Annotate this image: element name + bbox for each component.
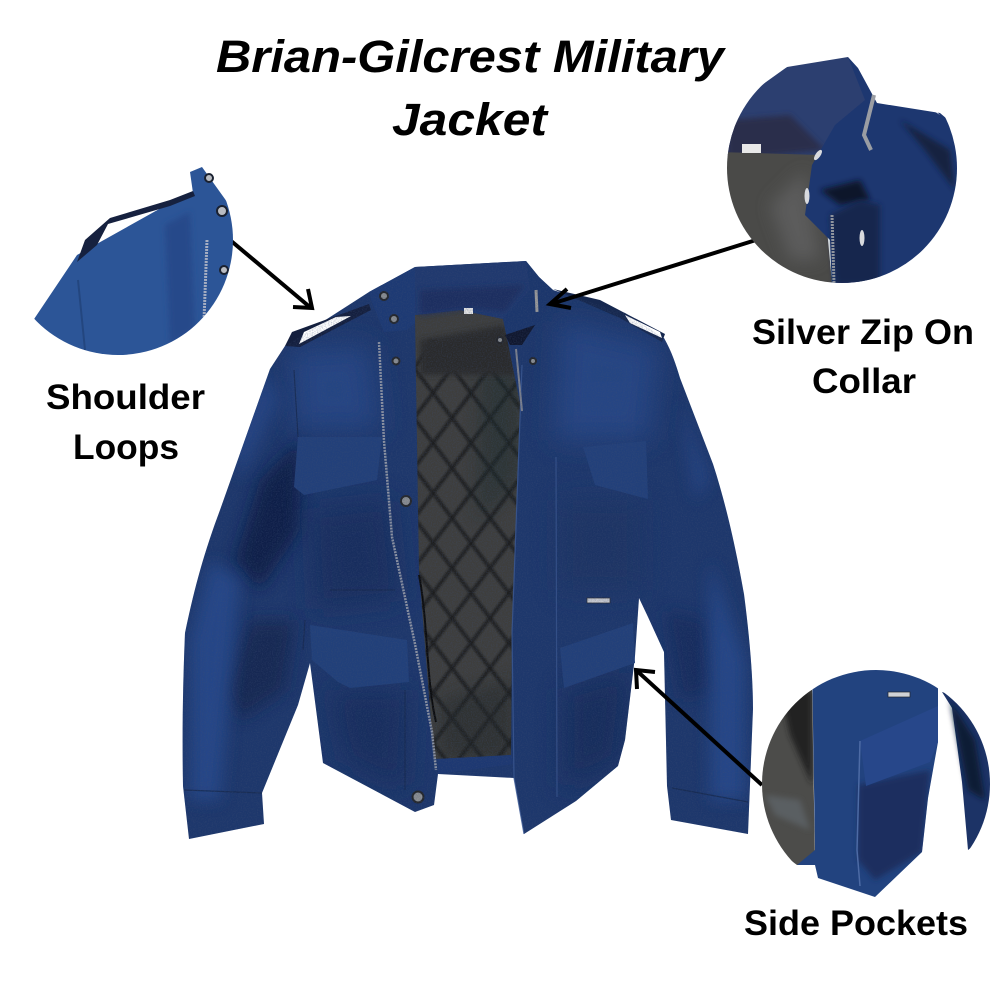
collar interior	[728, 57, 865, 155]
collar snaps	[804, 149, 864, 246]
shoulder strap	[77, 191, 195, 262]
main zipper	[379, 342, 436, 770]
label: shoulder loops	[46, 378, 205, 467]
front panel	[797, 660, 938, 897]
snaps	[380, 292, 536, 802]
arrow: side pockets	[636, 670, 762, 785]
right zipper	[516, 349, 522, 411]
sleeve	[942, 692, 995, 850]
lining: quilted interior	[410, 310, 525, 765]
left chest pocket flap	[294, 437, 382, 495]
shoulder fabric	[34, 167, 233, 355]
shoulder zipper	[204, 240, 207, 320]
hem inside	[438, 755, 514, 774]
right shoulder loop	[553, 289, 665, 342]
detail circle: side pockets	[762, 670, 990, 897]
collar zipper	[864, 95, 874, 150]
left collar band	[369, 267, 415, 332]
right chest pocket flap	[583, 441, 648, 499]
label: silver zip on collar	[752, 313, 974, 401]
pocket zip pull	[587, 598, 610, 603]
placket line	[857, 741, 860, 886]
label: side pockets: Side Pockets	[744, 904, 968, 943]
detail circle: shoulder loops	[34, 167, 233, 355]
detail circle: zip collar	[720, 57, 960, 290]
front fabric	[805, 57, 960, 290]
arrow: shoulder loops	[230, 240, 312, 308]
lining	[762, 690, 815, 865]
right lower pocket flap	[560, 623, 635, 688]
right collar band	[503, 261, 553, 340]
label: silver zip on collar: Collar	[812, 362, 916, 401]
shoulder seam	[78, 280, 85, 350]
shoulder snaps	[205, 174, 228, 274]
neck label	[464, 308, 473, 314]
darker fabric folds	[165, 212, 195, 345]
collar zip	[536, 290, 537, 312]
title: Jacket	[392, 94, 549, 145]
zip pull	[888, 692, 910, 697]
lower pocket shadow	[858, 770, 930, 880]
white shoulder notch	[936, 112, 940, 115]
label: shoulder loops: Loops	[73, 428, 179, 467]
left lower pocket flap	[310, 625, 409, 688]
title	[216, 31, 726, 145]
arrow: zip collar	[550, 240, 756, 308]
lower zipper	[832, 215, 834, 283]
neck label	[742, 144, 761, 153]
left shoulder loop	[285, 304, 371, 347]
jacket photo	[180, 255, 760, 845]
jacket shading	[190, 320, 745, 800]
label: shoulder loops: Shoulder	[46, 378, 205, 417]
jacket silhouette	[183, 261, 753, 839]
label: silver zip on collar: Silver Zip On	[752, 313, 974, 352]
back of collar	[415, 261, 535, 319]
pocket flap	[860, 706, 938, 786]
lining	[727, 152, 832, 282]
title: Brian-Gilcrest Military	[216, 31, 726, 82]
seams and front plackets	[184, 365, 748, 834]
fabric grain	[180, 255, 760, 845]
